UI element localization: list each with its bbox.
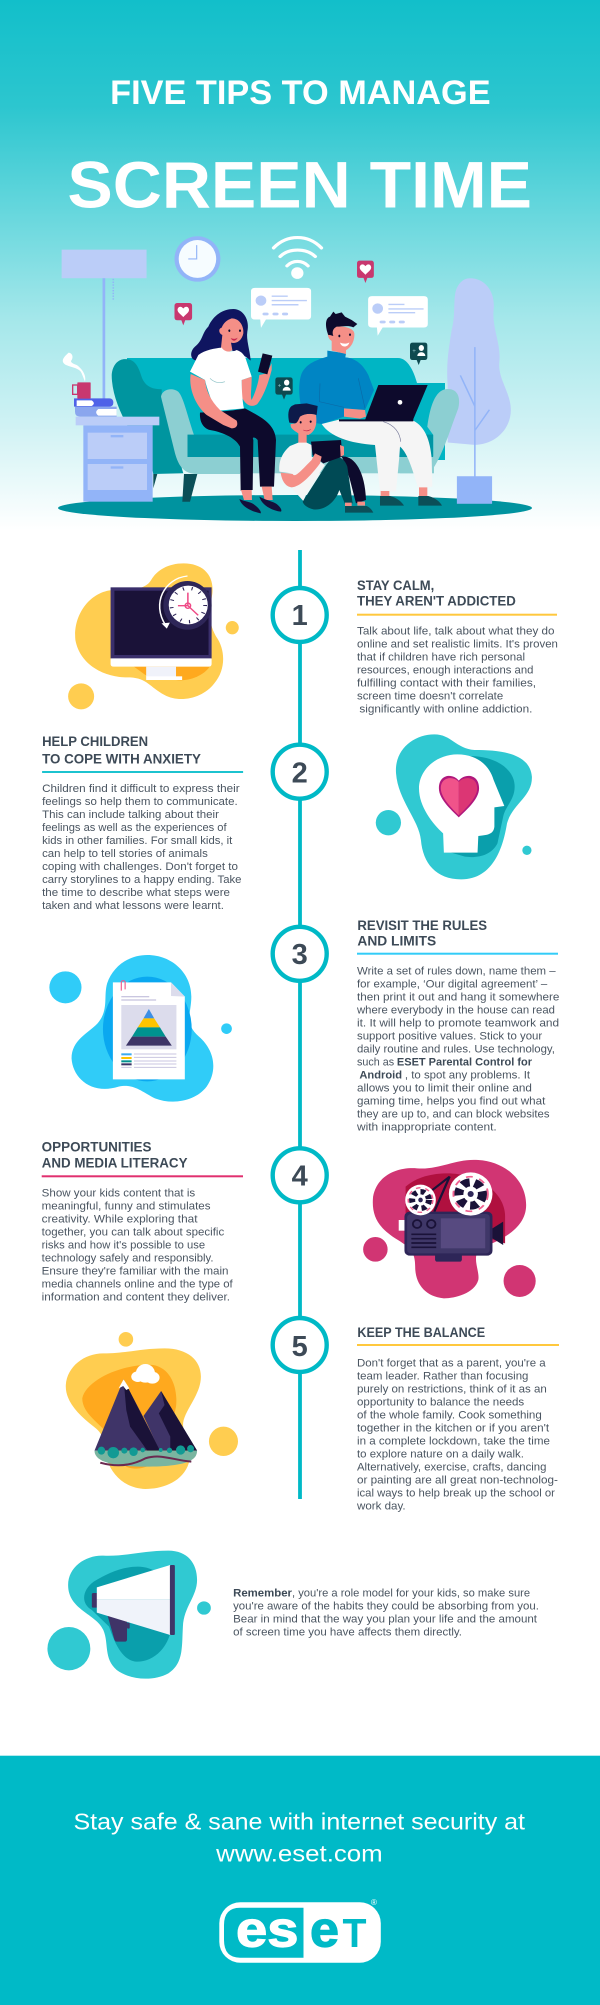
ESET logo: ®: [371, 1898, 377, 1907]
body: tip 5: Alternatively, exercise, crafts, dancing: [357, 1461, 546, 1473]
icon: film projector: [363, 1160, 536, 1298]
body: tip 5: to explore nature on a daily walk.: [357, 1448, 524, 1460]
body: tip 4: media channels online and the type of: [42, 1279, 234, 1291]
heading: tip 3: AND LIMITS: [357, 934, 436, 949]
body: tip 1: significantly with online addiction.: [359, 703, 532, 715]
callout: remember: Remember: [233, 1587, 293, 1599]
body: tip 1: resources, enough interactions and: [357, 664, 533, 676]
icon: monitor with clock: [68, 563, 239, 709]
body: tip 3: gaming time, helps you find out what: [357, 1095, 546, 1107]
title: SCREEN TIME: [67, 148, 532, 222]
panel: tip 3 text: [356, 918, 559, 1133]
body: tip 3: Android: [359, 1069, 402, 1081]
body: tip 4: Show your kids content that is: [42, 1188, 196, 1200]
body: tip 3: Write a set of rules down, name them –: [357, 965, 556, 977]
hero background objects: [62, 236, 511, 504]
sofa: [112, 358, 459, 502]
body: tip 4: creativity. While exploring that: [42, 1214, 198, 1226]
body: tip 1: Talk about life, talk about what they do: [357, 625, 554, 637]
step 4 number: [273, 1148, 327, 1202]
body: tip 3: with inappropriate content.: [356, 1121, 497, 1133]
heading: tip 4: [42, 1140, 243, 1177]
footer message: www.eset.com: [215, 1840, 383, 1866]
icon: heart bubble right: [357, 261, 374, 283]
panel: footer: [0, 1756, 600, 2005]
icon: mountains: [66, 1332, 238, 1489]
icon: follow bubble left: [275, 377, 293, 400]
body: tip 2: taken and what lessons were learnt.: [42, 900, 224, 912]
body: tip 2: feelings so help them to communicate.: [42, 796, 238, 808]
icon: document with pyramid chart: [49, 955, 232, 1102]
heading: tip 5: KEEP THE BALANCE: [357, 1325, 485, 1340]
body: tip 1: screen time doesn't correlate: [357, 690, 503, 702]
step 3 number: [273, 927, 327, 981]
body: tip 3: then print it out and hang it somewhere: [357, 991, 559, 1003]
body: tip 5: opportunity to balance the needs: [357, 1396, 525, 1408]
body: tip 3: , to spot any problems. It: [405, 1069, 531, 1081]
person: woman with phone: [190, 309, 281, 513]
body: tip 4: together, you can talk about specific: [42, 1227, 225, 1239]
heading: tip 4: AND MEDIA LITERACY: [42, 1155, 188, 1170]
step 1 number: 1: [292, 600, 308, 632]
chat bubble right: [368, 296, 428, 336]
callout: remember: , you're a role model for your kids, so make sure: [292, 1587, 530, 1599]
heading: tip 2: HELP CHILDREN: [42, 734, 148, 749]
person: boy with tablet: [279, 403, 373, 513]
body: tip 3: daily routine and rules. Use technology,: [357, 1043, 555, 1055]
step 4 number: 4: [292, 1160, 308, 1192]
panel: tip 5 text: [356, 1325, 559, 1512]
body: tip 3: for example, ‘Our digital agreement’ –: [357, 978, 548, 990]
body: tip 3: ESET Parental Control for: [397, 1056, 533, 1068]
body: tip 3: where everybody in the house can read: [356, 1004, 555, 1016]
footer message: [74, 1808, 526, 1866]
step 5 number: [273, 1318, 327, 1372]
body: tip 4: [42, 1188, 234, 1304]
body: tip 1: fulfilling contact with their families,: [357, 677, 536, 689]
body: tip 3: [356, 965, 559, 1133]
icon: megaphone: [47, 1551, 211, 1679]
body: tip 2: coping with challenges. Don't forget to: [42, 861, 238, 873]
step 2 number: [273, 745, 327, 799]
icon: head with heart: [376, 734, 532, 879]
panel: header background: [0, 0, 600, 530]
body: tip 1: that if children have rich personal: [357, 651, 525, 663]
floor ellipse: [58, 495, 532, 521]
panel: tip 2 text: [42, 734, 243, 912]
step 2 number: 2: [292, 758, 308, 790]
plant: [447, 278, 511, 504]
floor lamp: [62, 250, 147, 399]
callout: remember: [233, 1587, 539, 1638]
body: tip 2: [42, 783, 241, 912]
chat bubble left: [251, 288, 311, 328]
step 5 number: 5: [292, 1331, 308, 1363]
body: tip 5: purely on restrictions, think of it as an: [357, 1383, 547, 1395]
panel: tip 4 text: [42, 1140, 243, 1304]
step 3 number: 3: [292, 939, 308, 971]
body: tip 5: [356, 1357, 558, 1512]
body: tip 5: ical ways to help break up the school or: [357, 1487, 555, 1499]
body: tip 3: support positive values. Stick to your: [357, 1030, 542, 1042]
icon: wifi: [274, 238, 321, 279]
body: tip 3: such as: [357, 1056, 394, 1068]
callout: remember: you're aware of the habits they could be absorbing from you.: [233, 1600, 539, 1612]
body: tip 2: kids in other families. For small kids, it: [42, 835, 233, 847]
heading: tip 4: OPPORTUNITIES: [42, 1140, 152, 1155]
body: tip 5: in a complete lockdown, take the time: [357, 1435, 550, 1447]
body: tip 3: allows you to limit their online and: [357, 1082, 532, 1094]
body: tip 2: Children find it difficult to express their: [42, 783, 240, 795]
ESET logo: e: [310, 1902, 339, 1958]
body: tip 4: information and content they deliver.: [42, 1292, 230, 1304]
body: tip 4: risks and how it's possible to use: [42, 1240, 205, 1252]
title: [67, 74, 532, 222]
body: tip 5: team leader. Rather than focusing: [357, 1370, 528, 1382]
panel: tip 1 text: [357, 578, 558, 715]
body: tip 5: together in the kitchen or if you aren't: [357, 1422, 550, 1434]
heading: tip 2: TO COPE WITH ANXIETY: [42, 751, 201, 766]
body: tip 2: can help to tell stories of animals: [42, 848, 208, 860]
heading: tip 3: [357, 918, 558, 955]
ESET logo: [219, 1898, 381, 1963]
body: tip 2: feelings as well as the experiences of: [42, 822, 227, 834]
heading: tip 1: THEY AREN'T ADDICTED: [357, 594, 516, 609]
callout: remember: of screen time you have affects them directly.: [233, 1626, 462, 1638]
body: tip 1: [357, 625, 558, 715]
body: tip 4: technology safely and responsibly.: [42, 1253, 214, 1265]
hero illustration: family on sofa: [58, 236, 532, 521]
heading: tip 3: REVISIT THE RULES: [357, 918, 487, 933]
body: tip 2: carry storylines to a happy ending. Take: [42, 874, 241, 886]
body: tip 4: meaningful, funny and stimulates: [42, 1201, 211, 1213]
body: tip 3: it. It will help to promote teamwork and: [357, 1017, 559, 1029]
heading: tip 1: STAY CALM,: [357, 578, 434, 593]
body: tip 1: online and set realistic limits. It's proven: [357, 638, 558, 650]
title: FIVE TIPS TO MANAGE: [110, 74, 491, 112]
body: tip 2: the time to describe what steps were: [42, 887, 230, 899]
side cabinet: [76, 417, 159, 502]
books and mug: [63, 353, 117, 417]
body: tip 2: This can include talking about their: [42, 809, 219, 821]
heading: tip 1: [357, 578, 557, 616]
footer message: Stay safe & sane with internet security at: [74, 1808, 526, 1834]
callout: remember: Bear in mind that the way you plan your life and the amount: [233, 1613, 538, 1625]
person: man with laptop: [299, 312, 442, 506]
body: tip 5: work day.: [356, 1500, 406, 1512]
icon: wall clock: [174, 236, 220, 282]
heading: tip 2: [42, 734, 243, 773]
icon: follow bubble right: [410, 343, 427, 365]
timeline line: [298, 550, 302, 1499]
body: tip 5: Don't forget that as a parent, you're a: [357, 1357, 546, 1369]
body: tip 3: they are up to, and can block websites: [357, 1108, 550, 1120]
body: tip 5: of the whole family. Cook something: [357, 1409, 542, 1421]
ESET logo: es: [236, 1902, 298, 1958]
step 1 number: [273, 588, 327, 642]
body: tip 4: Ensure they're familiar with the main: [42, 1266, 229, 1278]
ESET logo: T: [342, 1910, 366, 1956]
icon: heart bubble left: [174, 303, 192, 325]
body: tip 5: or painting are all great non-technolog-: [357, 1474, 558, 1486]
